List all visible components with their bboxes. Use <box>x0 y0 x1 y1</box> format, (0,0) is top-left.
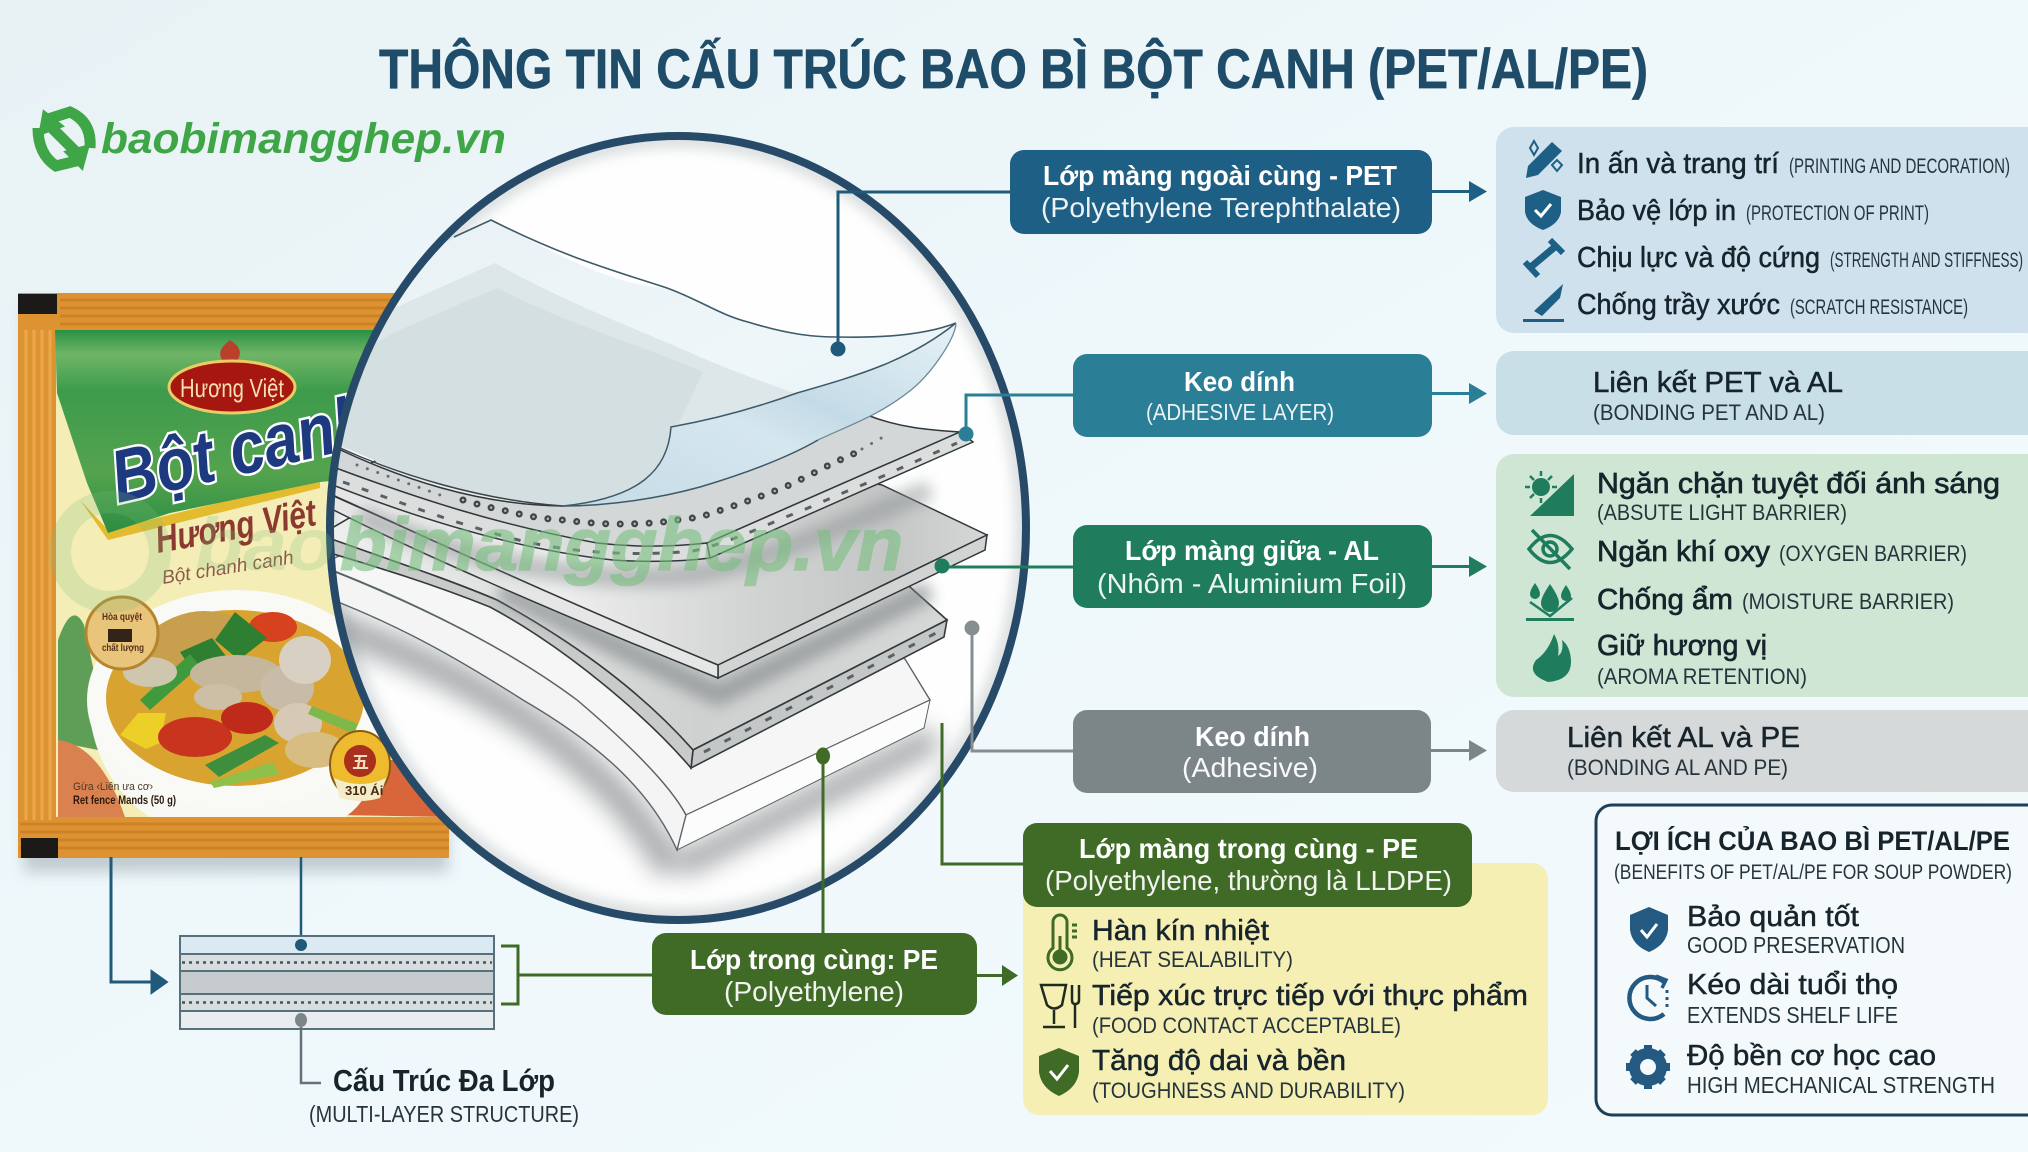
label box: adhesive grey: (Adhesive) <box>1182 752 1318 783</box>
multi-layer caption: (MULTI-LAYER STRUCTURE) <box>309 1101 579 1127</box>
row: strength: Chịu lực và độ cứng <box>1577 242 1820 274</box>
shadow under AL <box>500 590 930 695</box>
connector: AL <box>936 560 1073 572</box>
label box: adhesive grey: Keo dính <box>1195 721 1310 752</box>
AL foil layer <box>334 460 989 680</box>
row: oxygen barrier: Ngăn khí oxy <box>1597 536 1771 568</box>
row: light barrier <box>1597 468 2000 525</box>
arrow: adhesive <box>1432 383 1487 404</box>
icon: clock <box>1629 976 1667 1019</box>
row: aroma retention: (AROMA RETENTION) <box>1597 664 1807 689</box>
logo oval: Hương Việt: Hương Việt <box>180 373 285 403</box>
item: good preservation <box>1687 901 1905 958</box>
icon: strength tool <box>1525 240 1563 276</box>
circle outline <box>330 136 1026 920</box>
watermark on pouch: bao <box>195 503 335 586</box>
panel: AL properties <box>1496 454 2028 697</box>
pouch name: Bột canh: Bột canh <box>103 378 380 519</box>
multi-layer caption <box>309 1063 579 1127</box>
net weight text: Gừa ‹Liên ưa cơ› <box>73 781 153 793</box>
soup powder pouch <box>18 293 449 872</box>
label box: inner PE: Lớp màng trong cùng - PE <box>1079 833 1418 864</box>
gold seal: chất lượng <box>102 642 144 654</box>
icon: shield <box>1525 190 1561 230</box>
PET film layer <box>320 220 956 506</box>
icon: no oxygen eye <box>1529 530 1572 569</box>
red seal <box>330 731 390 801</box>
panel: bonding AL PE: Liên kết AL và PE <box>1567 722 1800 754</box>
pouch corner marks <box>18 294 58 858</box>
panel: bonding AL PE: (BONDING AL AND PE) <box>1567 755 1788 780</box>
benefits heading: LỢI ÍCH CỦA BAO BÌ PET/AL/PE <box>1615 824 2010 856</box>
label box: adhesive layer: (ADHESIVE LAYER) <box>1146 399 1334 425</box>
shadow under adhesive <box>360 490 930 577</box>
icon: flame <box>1533 634 1571 682</box>
arrow: AL <box>1432 556 1487 577</box>
connector: pouch top dot <box>300 857 302 945</box>
label box: inner PE lower: Lớp trong cùng: PE <box>690 944 938 975</box>
soup ingredients <box>249 612 297 642</box>
connector: PE lower <box>818 749 828 933</box>
row: food contact <box>1092 980 1528 1038</box>
item: mechanical strength: Độ bền cơ học cao <box>1687 1040 1936 1072</box>
item: good preservation: Bảo quản tốt <box>1687 901 1859 933</box>
pouch shadow <box>18 829 454 878</box>
arrow: lower PE <box>977 965 1018 986</box>
panel: PE properties <box>1023 823 1548 1115</box>
label box: inner PE lower <box>652 933 977 1015</box>
arrow: PET <box>1432 181 1487 202</box>
pouch body <box>18 293 449 858</box>
benefits heading <box>1614 824 2012 884</box>
pouch green label <box>55 330 373 533</box>
adhesive layer 1 <box>320 415 973 561</box>
connector: PE to top box <box>942 723 1023 864</box>
PET fold outlines <box>563 323 956 506</box>
row: moisture barrier: Chống ẩm <box>1597 584 1733 616</box>
item: shelf life: EXTENDS SHELF LIFE <box>1687 1002 1898 1028</box>
PET layer top line <box>454 220 956 337</box>
multi-layer caption: Cấu Trúc Đa Lớp <box>333 1063 555 1098</box>
item: good preservation: GOOD PRESERVATION <box>1687 932 1905 958</box>
panel: bonding AL PE <box>1496 710 2028 792</box>
row: toughness: (TOUGHNESS AND DURABILITY) <box>1092 1078 1405 1103</box>
row: light barrier: (ABSUTE LIGHT BARRIER) <box>1597 500 1847 525</box>
pouch inner cream <box>56 330 449 817</box>
multi-layer leader <box>301 1027 321 1083</box>
gold seal <box>86 597 158 669</box>
bracket connector <box>501 946 652 1004</box>
label box: PET: Lớp màng ngoài cùng - PET <box>1043 160 1397 191</box>
logo text: baobimangghep.vn <box>101 115 506 163</box>
item: mechanical strength <box>1687 1040 1995 1098</box>
net weight text <box>73 781 176 807</box>
icon: light barrier <box>1525 471 1574 516</box>
icon: green shield <box>1039 1048 1079 1096</box>
circle fill <box>330 136 1026 920</box>
row: moisture barrier <box>1597 584 1954 616</box>
label box: adhesive grey <box>1073 710 1431 793</box>
icon: glass and fork <box>1041 985 1079 1028</box>
watermark on layers: bimangghep.vn <box>340 503 903 586</box>
arrow: adhesive grey <box>1431 740 1487 761</box>
label box: PET: (Polyethylene Terephthalate) <box>1041 192 1401 223</box>
connector: adhesive grey <box>966 622 1073 751</box>
row: toughness: Tăng độ dai và bền <box>1092 1045 1346 1077</box>
inner rim shadow <box>333 140 1023 916</box>
row: oxygen barrier <box>1597 536 1967 568</box>
connector: pouch to diagram <box>111 857 166 992</box>
grey sheet outer <box>375 263 794 462</box>
row: protection: (PROTECTION OF PRINT) <box>1746 202 1929 225</box>
row: heat sealability: Hàn kín nhiệt <box>1092 915 1269 947</box>
row: aroma retention: Giữ hương vị <box>1597 630 1767 662</box>
row: food contact: (FOOD CONTACT ACCEPTABLE) <box>1092 1013 1401 1038</box>
row: toughness <box>1092 1045 1405 1103</box>
row: printing: In ấn và trang trí <box>1577 148 1779 180</box>
label box: inner PE: (Polyethylene, thường là LLDPE) <box>1045 865 1452 896</box>
inner PE layer <box>335 556 931 852</box>
row: moisture barrier: (MOISTURE BARRIER) <box>1742 589 1954 614</box>
row: light barrier: Ngăn chặn tuyệt đối ánh sáng <box>1597 468 2000 500</box>
soup bowl <box>87 590 387 817</box>
net weight text: Ret fence Mands (50 g) <box>73 793 176 807</box>
PET fold <box>563 323 956 506</box>
multi-layer diagram <box>180 936 494 1029</box>
row: heat sealability: (HEAT SEALABILITY) <box>1092 947 1293 972</box>
label box: inner PE lower: (Polyethylene) <box>724 976 904 1007</box>
PET clear sheet <box>375 221 951 462</box>
row: scratch: Chống trầy xước <box>1577 289 1780 321</box>
item: shelf life: Kéo dài tuổi thọ <box>1687 969 1898 1001</box>
logo: baobimangghep.vn <box>38 112 506 168</box>
layers stack <box>320 140 1023 916</box>
left vegetables <box>58 615 100 750</box>
row: food contact: Tiếp xúc trực tiếp với thực phẩm <box>1092 980 1528 1012</box>
adhesive layer 2 <box>334 518 948 770</box>
watermark <box>60 502 903 602</box>
shadow under PE edge right <box>680 738 935 866</box>
panel: bonding PET AL <box>1496 351 2028 435</box>
pouch tagline: Bột chanh canh <box>160 547 295 589</box>
icon: thermometer <box>1048 915 1077 970</box>
row: aroma retention <box>1597 630 1807 689</box>
label box: AL: (Nhôm - Aluminium Foil) <box>1097 568 1407 599</box>
icon: gear <box>1626 1045 1670 1089</box>
icon: moisture <box>1526 583 1574 621</box>
shadow under PE edge left <box>330 625 672 870</box>
row: strength <box>1577 242 2023 274</box>
connector: adhesive <box>960 395 1073 440</box>
gold stripe <box>80 478 320 540</box>
row: heat sealability <box>1092 915 1293 972</box>
watermark emblem <box>60 502 160 602</box>
pouch brand: Hương Việt <box>152 492 320 562</box>
label box: PET <box>1010 150 1432 234</box>
title: THÔNG TIN CẤU TRÚC BAO BÌ BỘT CANH (PET/AL/PE) <box>379 37 1648 100</box>
row: oxygen barrier: (OXYGEN BARRIER) <box>1779 541 1967 566</box>
panel: bonding PET AL: Liên kết PET và AL <box>1593 367 1843 399</box>
grey sheet inner <box>320 288 703 506</box>
red seal: 五 <box>352 753 369 772</box>
label box: adhesive layer: Keo dính <box>1184 366 1295 397</box>
icon: blue shield <box>1630 907 1668 952</box>
label box: AL: Lớp màng giữa - AL <box>1125 535 1379 566</box>
gold seal: Hòa quyệt <box>102 612 143 623</box>
panel: bonding PET AL: (BONDING PET AND AL) <box>1593 400 1825 425</box>
row: protection: Bảo vệ lớp in <box>1577 195 1736 227</box>
icon: recycling arrows <box>38 112 90 168</box>
label box: AL <box>1073 525 1432 608</box>
panel: benefits <box>1596 805 2028 1115</box>
row: scratch <box>1577 289 1968 321</box>
label box: adhesive layer <box>1073 354 1432 437</box>
label box: inner PE <box>1023 823 1472 907</box>
icon: scalpel <box>1523 284 1564 322</box>
connector: PET <box>832 192 1010 355</box>
panel: PET properties <box>1496 127 2028 333</box>
icon: pencil <box>1526 141 1562 178</box>
magnifier circle <box>320 136 1026 920</box>
item: mechanical strength: HIGH MECHANICAL STRENGTH <box>1687 1072 1995 1098</box>
row: protection <box>1577 195 1929 227</box>
logo oval: Hương Việt <box>169 340 295 413</box>
item: shelf life <box>1687 969 1898 1028</box>
row: printing <box>1577 148 2010 180</box>
red seal: 310 Ái <box>345 783 383 798</box>
